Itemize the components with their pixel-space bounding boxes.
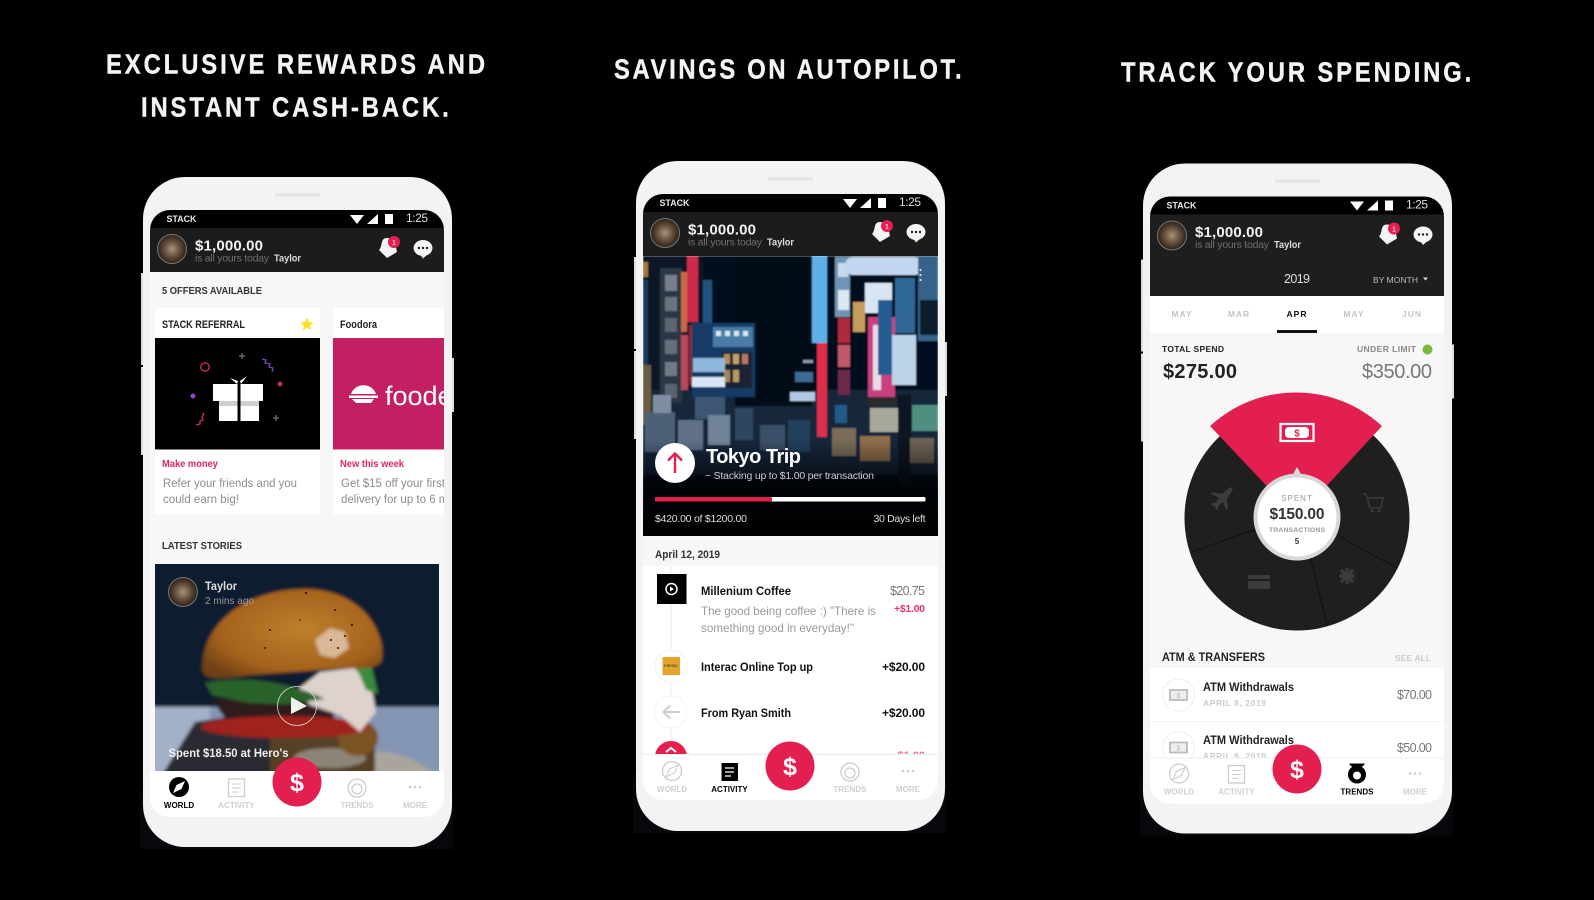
goal days left: 30 Days left (874, 513, 926, 525)
button: send money (766, 742, 814, 790)
wheel centre: TRANSACTIONS (1269, 527, 1325, 534)
row: atm withdrawal 2: $ (1177, 746, 1181, 752)
bottom navigation: ACTIVITY (1218, 788, 1255, 796)
account header: Taylor (767, 236, 794, 248)
status bar: STACK (166, 214, 197, 225)
phone 3: spending (1140, 164, 1454, 836)
wheel centre: 5 (1295, 537, 1300, 546)
status bar: STACK (1166, 200, 1197, 212)
goal title: Tokyo Trip (706, 446, 801, 468)
bottom navigation (164, 777, 426, 808)
status bar (643, 194, 938, 212)
see all link: SEE ALL (1395, 653, 1431, 663)
account header: 1 (392, 238, 396, 247)
bottom navigation: MORE (1403, 788, 1428, 796)
month tabs (1150, 296, 1444, 333)
story author: Taylor (205, 579, 237, 593)
row: atm withdrawal (1162, 679, 1432, 711)
offer card: foodora: Foodora (340, 319, 378, 331)
centre neon (812, 256, 827, 343)
status bar: STACK (660, 198, 690, 209)
wheel pointer (1291, 467, 1303, 478)
row: ryan smith: +$20.00 (882, 706, 925, 720)
row: interac: Interac (664, 663, 679, 668)
heading: rewards (106, 48, 485, 123)
row: atm withdrawal: $ (1177, 693, 1181, 700)
account header: 1 (1392, 224, 1396, 234)
bottom navigation: WORLD (657, 785, 687, 794)
account header: 1 (885, 222, 889, 231)
heading: rewards: EXCLUSIVE REWARDS AND (106, 48, 485, 80)
offer card: stack referral: Refer your friends and you (163, 478, 297, 490)
row: millenium coffee: something good in everyday!" (701, 621, 854, 635)
account header: $1,000.00 (1195, 224, 1263, 241)
story author (205, 581, 254, 606)
screen content (643, 194, 938, 801)
offer card: foodora: delivery for up to 6 m (341, 494, 448, 506)
status bar: 1:25 (899, 195, 921, 209)
icon: goal arrow (655, 443, 695, 483)
row: millenium coffee: Millenium Coffee (701, 584, 791, 598)
centre-left building (692, 323, 755, 397)
icon: asterisk (1339, 568, 1355, 584)
icon: card (1248, 575, 1270, 589)
spending limit (1357, 344, 1432, 383)
button: send money (272, 758, 322, 806)
row: atm withdrawal 2 (1162, 732, 1432, 764)
goal subtitle: ~ Stacking up to $1.00 per transaction (705, 470, 874, 482)
screen content (1150, 196, 1444, 804)
status bar: 1:25 (406, 211, 428, 225)
year selector: 2019 (1284, 272, 1310, 286)
icon: foodora cloche (349, 385, 378, 403)
bottom navigation: TRENDS (341, 801, 374, 810)
date heading: April 12, 2019 (655, 549, 720, 561)
phone body (140, 177, 454, 849)
phone body (633, 161, 947, 833)
offer card: stack referral: STACK REFERRAL (162, 319, 245, 331)
row: millenium coffee: +$1.00 (894, 603, 925, 615)
year selector: BY MONTH (1373, 275, 1418, 285)
account header (643, 212, 938, 256)
total spend (1162, 344, 1237, 383)
screen content (150, 210, 453, 817)
total spend: $275.00 (1163, 361, 1237, 383)
left signs (660, 268, 682, 403)
button: send money (1272, 744, 1322, 794)
goal amount: $420.00 of $1200.00 (655, 513, 747, 525)
total spend: TOTAL SPEND (1162, 344, 1224, 354)
offer card: foodora (333, 320, 444, 506)
row: millenium coffee: The good being coffee :) "There is (701, 604, 876, 618)
story avatar (168, 578, 198, 606)
row: millenium coffee: $20.75 (890, 584, 925, 598)
offer card: foodora: New this week (340, 458, 404, 470)
account header: is all yours today (688, 236, 763, 248)
offer card: stack referral: could earn big! (163, 494, 239, 506)
bottom navigation: MORE (896, 785, 921, 794)
account header: is all yours today (195, 252, 270, 264)
phone 2: savings (633, 161, 947, 833)
bottom navigation: TRENDS (834, 785, 867, 794)
offer card: foodora: Get $15 off your first (341, 478, 446, 490)
bottom navigation: ACTIVITY (711, 785, 748, 794)
row: ryan smith: From Ryan Smith (701, 706, 791, 720)
bottom navigation: WORLD (1164, 788, 1194, 796)
section title: stories: LATEST STORIES (162, 540, 242, 552)
bottom navigation: WORLD (164, 801, 194, 810)
offer card: stack referral: Make money (162, 458, 218, 470)
transfer list (1150, 668, 1444, 764)
wheel centre (1256, 476, 1338, 558)
story caption: Spent $18.50 at Hero's (168, 748, 288, 760)
row: interac: Interac Online Top up (701, 660, 813, 674)
account header: $1,000.00 (688, 222, 756, 238)
section title: transfers: ATM & TRANSFERS (1162, 650, 1265, 664)
month tabs: JUN (1402, 309, 1422, 319)
street level signs (645, 412, 675, 452)
progress bar (655, 497, 926, 502)
icon: banknote (1280, 424, 1314, 441)
button: send money: $ (783, 753, 797, 781)
account header (1150, 214, 1444, 259)
status bar (150, 210, 444, 228)
wheel centre: $150.00 (1270, 506, 1324, 523)
row: atm withdrawal: ATM Withdrawals (1203, 680, 1294, 694)
button: send money: $ (290, 769, 304, 797)
spending wheel (1184, 392, 1410, 630)
month tabs: MAR (1228, 309, 1250, 319)
section title: offers: 5 OFFERS AVAILABLE (162, 285, 262, 297)
bottom navigation: ACTIVITY (218, 801, 255, 810)
story card: burger photo (150, 560, 445, 778)
month tabs: MAY (1343, 309, 1365, 319)
account header: Taylor (274, 252, 301, 264)
phone body (1140, 164, 1454, 836)
icon: gift (190, 353, 282, 425)
row: atm withdrawal 2: $50.00 (1397, 741, 1432, 755)
bottom navigation (1150, 758, 1444, 804)
row: atm withdrawal: APRIL 8, 2019 (1203, 698, 1266, 708)
bottom navigation: TRENDS (1341, 788, 1374, 796)
icon: cart (1363, 494, 1383, 512)
wheel centre: SPENT (1281, 494, 1313, 503)
row: millenium coffee (657, 574, 925, 635)
account header: $1,000.00 (195, 238, 263, 254)
status bar (1150, 196, 1444, 214)
button: send money: $ (1290, 756, 1304, 784)
status bar: 1:25 (1406, 198, 1428, 212)
icon: play (278, 686, 316, 726)
spending limit: UNDER LIMIT (1357, 344, 1417, 354)
icon: plane (1211, 487, 1233, 510)
goal photo: tokyo street (643, 256, 938, 536)
account header: is all yours today (1195, 239, 1270, 251)
spending limit: $350.00 (1362, 361, 1432, 383)
row: partial transaction (655, 741, 924, 754)
row: atm withdrawal 2: APRIL 8, 2019 (1203, 751, 1266, 761)
transaction list (655, 574, 925, 754)
phone 1: rewards (140, 177, 454, 849)
right signs (835, 257, 850, 317)
story author: 2 mins ago (205, 595, 254, 607)
row: atm withdrawal: $70.00 (1397, 688, 1432, 702)
row: interac: +$20.00 (882, 660, 925, 674)
row: atm withdrawal 2: ATM Withdrawals (1203, 733, 1294, 747)
year selector (1150, 259, 1444, 296)
bottom navigation (643, 754, 938, 792)
heading: spending: TRACK YOUR SPENDING. (1121, 56, 1471, 88)
offer card: stack referral (155, 308, 320, 514)
icon: banknote: $ (1294, 428, 1300, 440)
row: ryan smith (655, 696, 925, 728)
account header: Taylor (1274, 239, 1301, 251)
heading: savings: SAVINGS ON AUTOPILOT. (614, 52, 962, 85)
row: partial transaction: -$1.00 (894, 750, 925, 762)
row: interac (655, 650, 925, 682)
account header (150, 228, 444, 272)
month tabs: APR (1287, 309, 1307, 319)
bottom navigation: MORE (403, 801, 428, 810)
heading: rewards: INSTANT CASH-BACK. (141, 91, 449, 123)
month tabs: MAY (1171, 309, 1193, 319)
offer card: foodora: foode (385, 381, 453, 411)
